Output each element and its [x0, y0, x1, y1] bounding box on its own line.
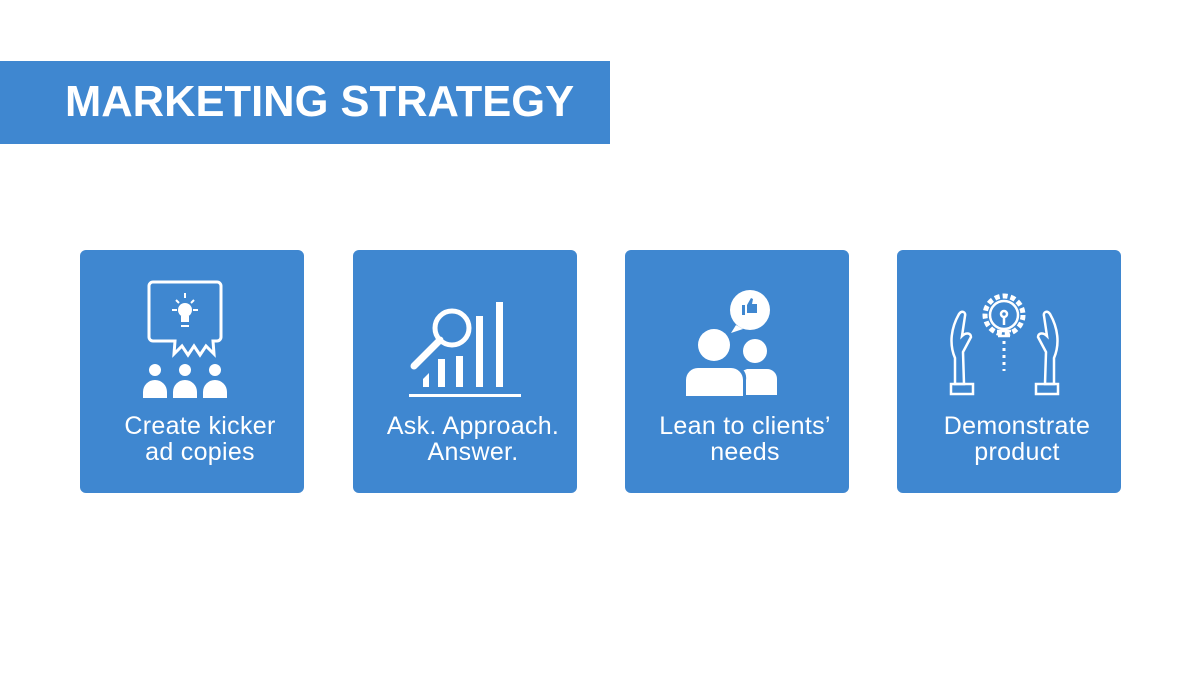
icon: hands with gear bulb [950, 294, 1060, 396]
icon: presentation idea [143, 280, 227, 398]
text: Create kicker [124, 412, 276, 440]
icon: people with like bubble [686, 290, 777, 396]
card: ask approach answer [353, 250, 577, 493]
text: ad copies [145, 438, 255, 466]
text: Ask. Approach. [387, 412, 559, 440]
text [387, 412, 559, 466]
icon: magnifier chart [409, 302, 521, 397]
card: lean to clients needs [625, 250, 849, 493]
text [944, 412, 1090, 466]
title bar [0, 61, 610, 144]
title bar: MARKETING STRATEGY [65, 78, 574, 126]
text: Lean to clients’ [659, 412, 831, 440]
card: create kicker ad copies [80, 250, 304, 493]
text: product [974, 438, 1060, 466]
card: demonstrate product [897, 250, 1121, 493]
text [124, 412, 276, 466]
text: Answer. [427, 438, 519, 466]
text: needs [710, 438, 780, 466]
text [659, 412, 831, 466]
text: Demonstrate [944, 412, 1090, 440]
